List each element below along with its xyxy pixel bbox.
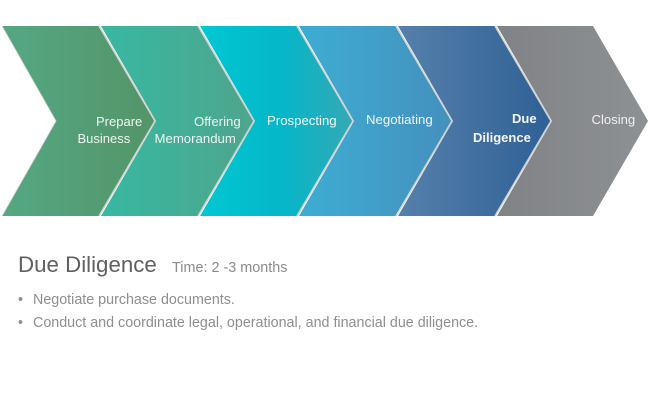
label: Due Diligence: Due (512, 111, 537, 126)
chevron: Offering Memorandum (101, 26, 254, 216)
bullet 2: Conduct and coordinate legal, operational, and financial due diligence. (33, 315, 478, 331)
chevron: Prepare Business (2, 26, 155, 216)
chevron: Closing (497, 26, 648, 216)
chevron: Negotiating (299, 26, 452, 216)
label: Prepare Business: Prepare (96, 114, 142, 129)
label: Prospecting: Prospecting (267, 113, 337, 128)
bullet 1: • (18, 292, 23, 308)
label: Negotiating: Negotiating (366, 112, 433, 127)
bullet list (18, 292, 478, 331)
heading: Due Diligence: Due Diligence (18, 252, 157, 277)
label: Prepare Business: Business (78, 131, 131, 146)
bullet 1: Negotiate purchase documents. (33, 292, 235, 308)
chevron: Due Diligence (398, 26, 551, 216)
label: Offering Memorandum: Offering (194, 114, 241, 129)
label: Offering Memorandum: Memorandum (154, 131, 236, 146)
chevron: Prospecting (200, 26, 353, 216)
label: Closing: Closing (592, 112, 635, 127)
bullet 2: • (18, 315, 23, 331)
time note: Time: 2 -3 months (172, 260, 287, 276)
label: Due Diligence: Diligence (473, 130, 531, 145)
